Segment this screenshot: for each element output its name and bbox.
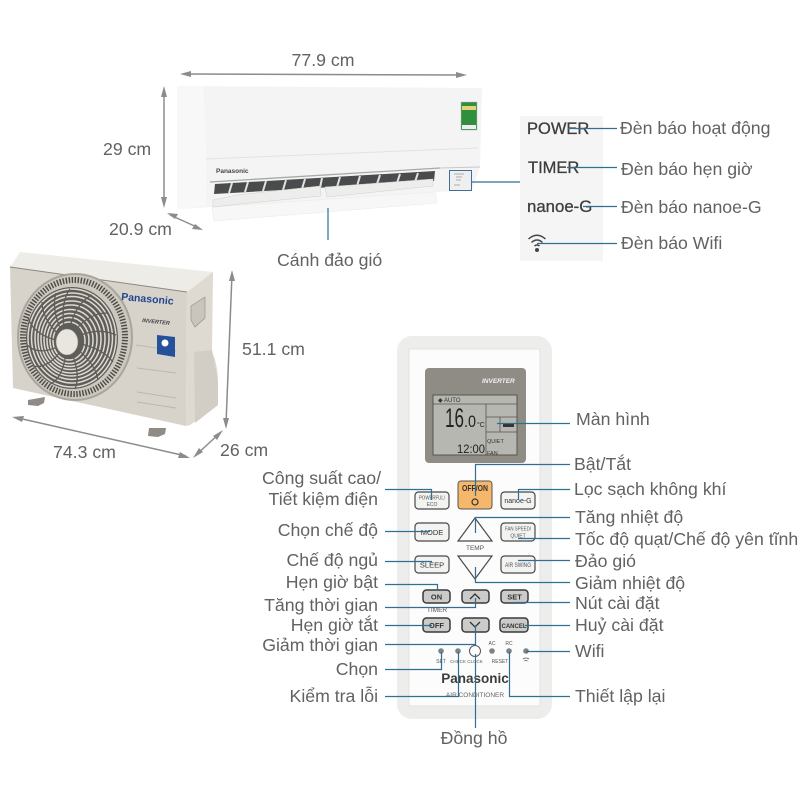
label: timer on: Hẹn giờ bật: [286, 572, 378, 592]
label: air purify: Lọc sạch không khí: [574, 479, 726, 499]
label: error check: Kiểm tra lỗi: [290, 685, 378, 706]
dimension: width 77.9 cm: [180, 50, 467, 78]
button SLEEP: SLEEP: [420, 560, 444, 570]
button SET: SET: [507, 592, 522, 602]
screen panel: QUIET: [487, 439, 504, 445]
button OFF/ON: [458, 481, 492, 509]
label: cancel: [525, 615, 664, 635]
indicator TIMER: Đèn báo hẹn giờ: [621, 159, 753, 179]
label: time down: Giảm thời gian: [262, 635, 378, 655]
indicator Wifi: Đèn báo Wifi: [621, 233, 722, 253]
small keys: AC: [489, 641, 496, 647]
dimension: depth 26 cm: 26 cm: [220, 440, 268, 460]
label: timer on: [286, 572, 438, 592]
unit body: [177, 86, 482, 209]
button CANCEL: CANCEL: [502, 624, 527, 630]
label: temp down: [476, 567, 685, 593]
inverter logo: INVERTER: [482, 378, 515, 385]
label: wifi: Wifi: [575, 641, 604, 661]
button SET: [501, 590, 528, 603]
indoor unit: [177, 86, 482, 221]
label: select: [336, 652, 442, 679]
button OFF/ON: OFF/ON: [462, 483, 488, 493]
indicator box: [450, 170, 472, 190]
label: flap: [277, 208, 382, 270]
screen panel: .0: [464, 412, 476, 431]
label: clock: [441, 654, 508, 748]
button SLEEP: [415, 556, 449, 573]
indicator Wifi: [528, 233, 722, 253]
dimension: height 51.1 cm: 51.1 cm: [242, 339, 305, 359]
dimension: length 74.3 cm: [12, 416, 190, 462]
panel: indicators: [520, 116, 770, 261]
button FAN SPEED: [501, 523, 535, 541]
button POWERFUL/ECO: [415, 492, 449, 509]
top: [10, 252, 213, 292]
button OFF: [423, 618, 450, 632]
dimension: height 29 cm: 29 cm: [103, 139, 151, 159]
front: [10, 267, 187, 426]
label: set: Nút cài đặt: [575, 593, 660, 613]
label: error check: [290, 652, 458, 706]
screen panel: ◆ AUTO: [438, 398, 461, 404]
brand: Panasonic: [121, 291, 174, 308]
label: reset: Thiết lập lại: [575, 686, 665, 706]
label: powerful: Tiết kiệm điện: [269, 489, 378, 509]
label: select: Chọn: [336, 659, 378, 679]
small keys: RC: [505, 641, 513, 647]
screen panel: °C: [477, 421, 485, 429]
label: time up: Tăng thời gian: [264, 595, 378, 615]
brand: Panasonic: [216, 168, 249, 175]
outdoor unit: [10, 252, 218, 437]
wind flap: [212, 192, 437, 221]
label: time down: [262, 626, 476, 655]
label: flap: Cánh đảo gió: [277, 250, 382, 270]
indicator TIMER: [528, 159, 753, 179]
label: reset: [510, 652, 665, 706]
button nanoe-G: [501, 492, 535, 509]
dimension: width 77.9 cm: 77.9 cm: [292, 50, 354, 70]
connector to indicators: [472, 181, 520, 183]
label: air purify: [518, 479, 726, 500]
indicator TIMER: TIMER: [528, 159, 579, 177]
button AIR SWING: [501, 556, 535, 573]
button MODE: MODE: [421, 528, 443, 537]
label: time up: [264, 595, 476, 615]
indicator POWER: Đèn báo hoạt động: [620, 118, 770, 138]
button CANCEL: [500, 618, 528, 632]
small keys: RESET: [492, 659, 508, 665]
inverter mark: INVERTER: [142, 318, 170, 327]
dimension: depth 26 cm: [193, 430, 268, 460]
brand: Panasonic: [441, 671, 509, 686]
button nanoe-G: nanoe-G: [504, 498, 532, 505]
vent opening: [214, 171, 435, 194]
button POWERFUL/ECO: POWERFUL/: [419, 496, 446, 502]
LCD: [433, 395, 517, 455]
dimension: length 74.3 cm: 74.3 cm: [53, 442, 116, 462]
screen panel: 12:00: [457, 442, 485, 456]
dimension: height 51.1 cm: [223, 270, 305, 429]
label: mode: Chọn chế độ: [278, 520, 378, 540]
button ON: [423, 590, 450, 603]
button FAN SPEED: QUIET: [510, 534, 526, 540]
button time up: [462, 590, 489, 603]
label: cancel: Huỷ cài đặt: [575, 615, 664, 635]
label: timer off: Hẹn giờ tắt: [291, 614, 378, 635]
label: fan speed: Tốc độ quạt/Chế độ yên tĩnh: [575, 529, 798, 549]
button AIR SWING: AIR SWING: [505, 563, 531, 569]
indicator nanoe-G: nanoe-G: [527, 197, 592, 216]
button FAN SPEED: FAN SPEED/: [505, 526, 532, 532]
label: sleep: Chế độ ngủ: [287, 550, 378, 570]
label: on/off: Bật/Tắt: [574, 453, 631, 474]
fan grille: [18, 274, 132, 400]
label: on/off: [476, 453, 631, 496]
dimension: depth 20.9 cm: [109, 213, 203, 239]
indicator POWER: POWER: [527, 120, 589, 138]
screen panel: FAN: [487, 451, 498, 457]
indicator POWER: [527, 118, 770, 138]
button TEMP down: [458, 556, 492, 579]
badge: [157, 335, 175, 357]
label: screen: Màn hình: [576, 409, 650, 429]
screen panel: 16: [445, 403, 464, 433]
button OFF: OFF: [429, 621, 444, 630]
button time down: [462, 618, 489, 632]
indicator nanoe-G: Đèn báo nanoe-G: [621, 197, 762, 217]
indicator nanoe-G: [527, 197, 762, 217]
button TEMP up: [458, 518, 492, 541]
label: temp up: Tăng nhiệt độ: [575, 507, 683, 527]
label: wifi: [526, 641, 604, 661]
small keys: SET: [436, 659, 446, 665]
small keys: [436, 641, 529, 665]
energy label: [461, 102, 477, 130]
button MODE: [415, 523, 449, 541]
screen panel: [425, 368, 526, 463]
dimension: depth 20.9 cm: 20.9 cm: [109, 219, 172, 239]
label: swing: [518, 551, 636, 571]
remote body: [397, 336, 552, 719]
label TEMP: TEMP: [466, 545, 484, 552]
button POWERFUL/ECO: ECO: [427, 502, 438, 508]
button ON: ON: [431, 592, 442, 602]
side: [186, 272, 218, 426]
dimension: height 29 cm: [103, 86, 167, 208]
louver blades: [213, 186, 321, 207]
label: temp up: [476, 507, 683, 533]
small keys: CHECK: [450, 659, 466, 664]
label TIMER: TIMER: [427, 607, 447, 614]
feet: [28, 397, 45, 406]
model text: AIR CONDITIONER: [446, 692, 504, 699]
label: powerful: [262, 468, 432, 509]
label: powerful: Công suất cao/: [262, 468, 381, 488]
label: temp down: Giảm nhiệt độ: [575, 573, 685, 593]
remote control: [397, 336, 552, 719]
label: swing: Đảo gió: [575, 551, 636, 571]
small keys: CLOCK: [467, 659, 483, 664]
label: clock: Đồng hồ: [441, 728, 508, 748]
front panel lines: [136, 345, 176, 408]
